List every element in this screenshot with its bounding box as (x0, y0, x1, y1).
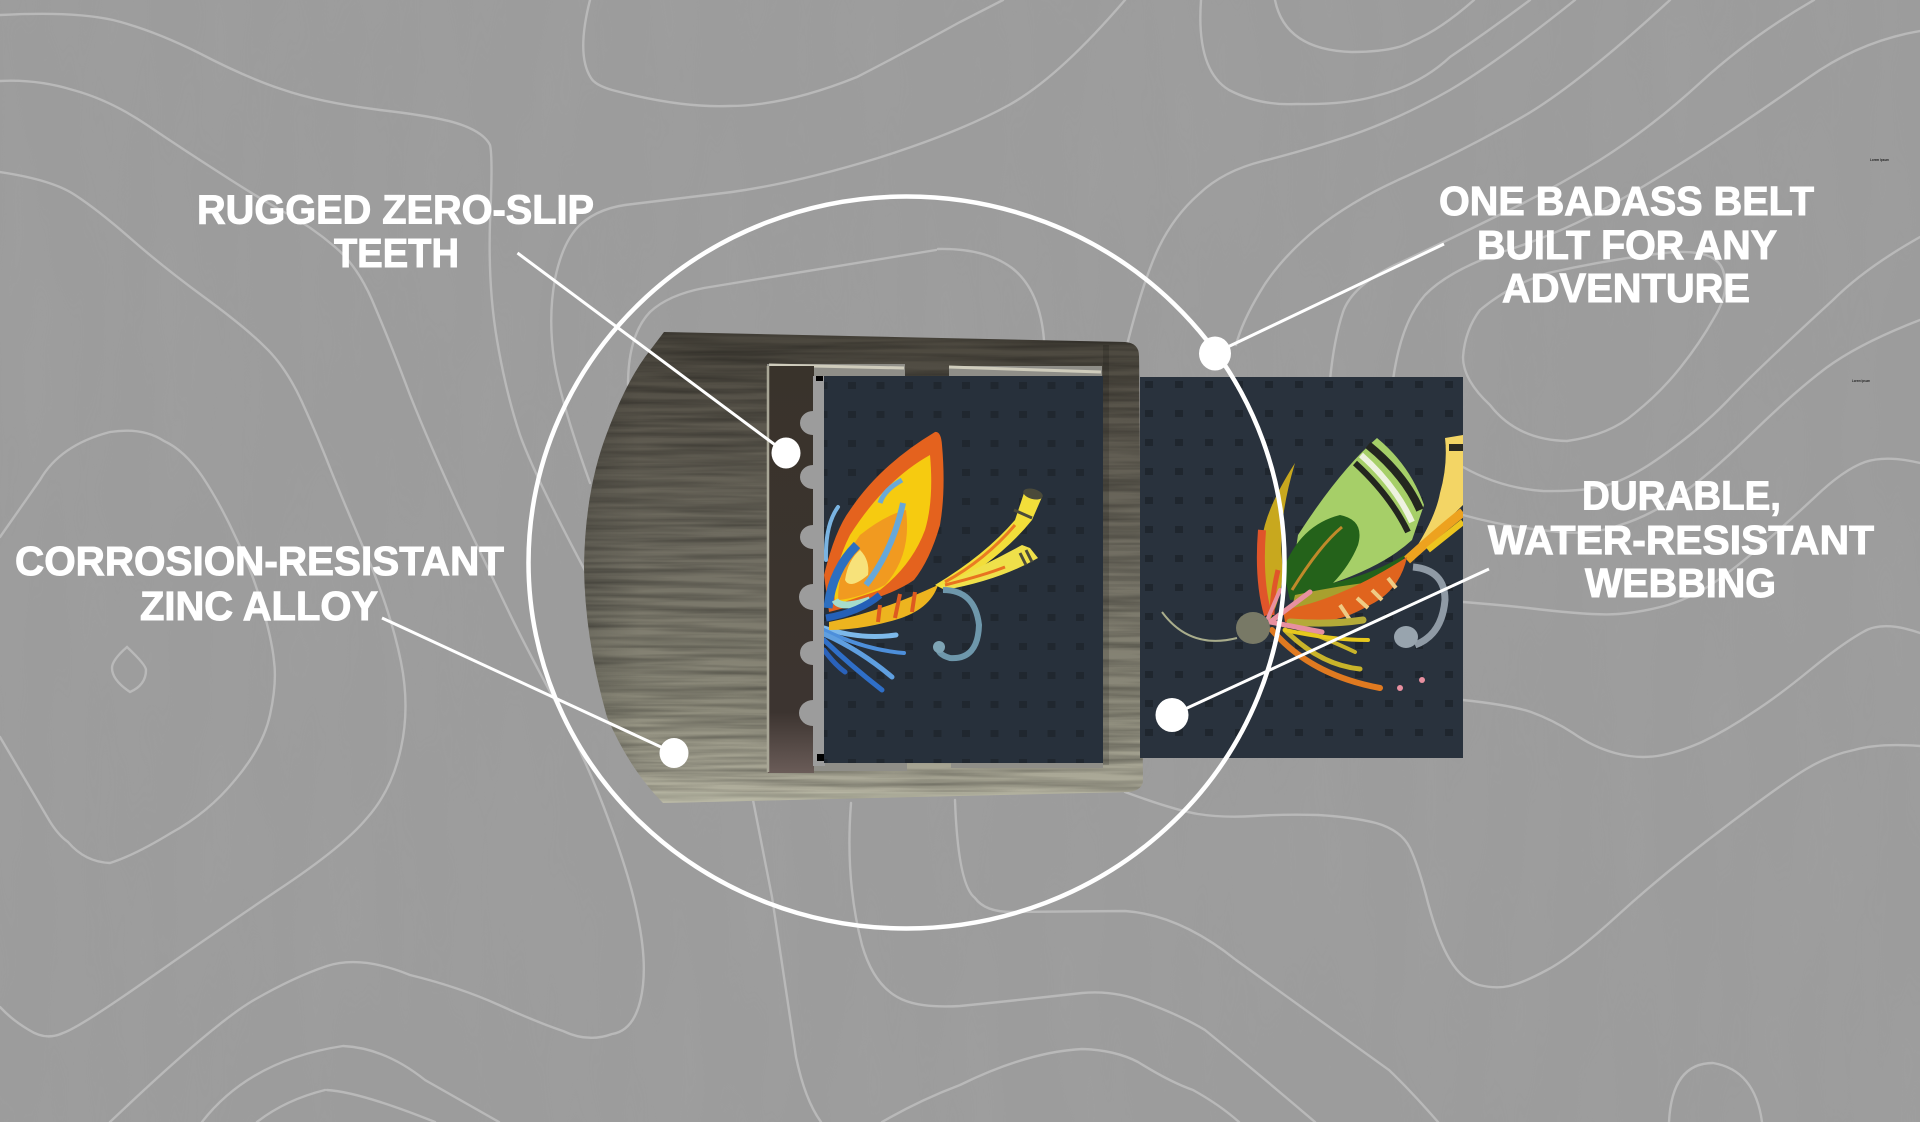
slot lip top right (949, 366, 1102, 376)
fly two: body (1293, 583, 1361, 608)
label (1439, 178, 1814, 311)
label: WEBBING (1585, 560, 1776, 606)
slot lip top left (767, 364, 905, 376)
slot lip bottom left (813, 760, 907, 771)
label: WATER-RESISTANT (1488, 517, 1874, 563)
label: ADVENTURE (1502, 265, 1750, 311)
label: TEETH (334, 230, 459, 276)
fly one: blue feathers (824, 507, 904, 690)
large circle outline (528, 196, 1284, 928)
label: DURABLE, (1582, 472, 1781, 518)
fly one: wing (824, 432, 944, 612)
tiny placeholder caption lower: Lorem Ipsum (1852, 378, 1870, 383)
label: BUILT FOR ANY (1477, 222, 1777, 268)
tiny placeholder caption upper: Lorem Ipsum (1870, 157, 1889, 162)
leader line (518, 253, 786, 453)
label: ZINC ALLOY (140, 583, 378, 629)
label (15, 538, 504, 629)
grey channel (813, 376, 825, 766)
belt buckle (580, 332, 1150, 804)
fly one: hook (938, 590, 979, 658)
fly two: green wing (1290, 438, 1424, 590)
leader line (1215, 244, 1444, 353)
fly two: hook (1413, 567, 1445, 645)
label (197, 186, 594, 276)
webbing outside buckle with fly (1140, 377, 1465, 758)
callout: rugged zero-slip teeth (197, 186, 800, 468)
label: RUGGED ZERO-SLIP (197, 186, 594, 232)
fly two: head and antenna (1236, 612, 1270, 644)
fly two: tail (1418, 435, 1463, 544)
fly one: body (829, 585, 938, 630)
leader line (382, 618, 674, 753)
leader line (1172, 569, 1489, 715)
callout: zinc alloy (15, 538, 688, 768)
slot lip bottom right (951, 760, 1103, 768)
label: CORROSION-RESISTANT (15, 538, 504, 584)
marker dot (660, 738, 688, 768)
callout: durable webbing (1156, 472, 1874, 732)
marker dot (1156, 698, 1188, 732)
zero-slip teeth (799, 411, 827, 726)
slot wall (768, 366, 814, 773)
callout: badass belt (1199, 178, 1814, 370)
fly two: rays and lower feathers (1268, 590, 1380, 688)
marker dot (1199, 336, 1231, 370)
marker dot (772, 438, 800, 468)
label (1488, 472, 1874, 606)
fly two: upper feathers (1261, 463, 1295, 620)
label: ONE BADASS BELT (1439, 178, 1814, 224)
fly two: pink specks (1397, 685, 1403, 691)
webbing inside buckle with fly (824, 376, 1103, 763)
fly one: feelers (935, 490, 1042, 590)
